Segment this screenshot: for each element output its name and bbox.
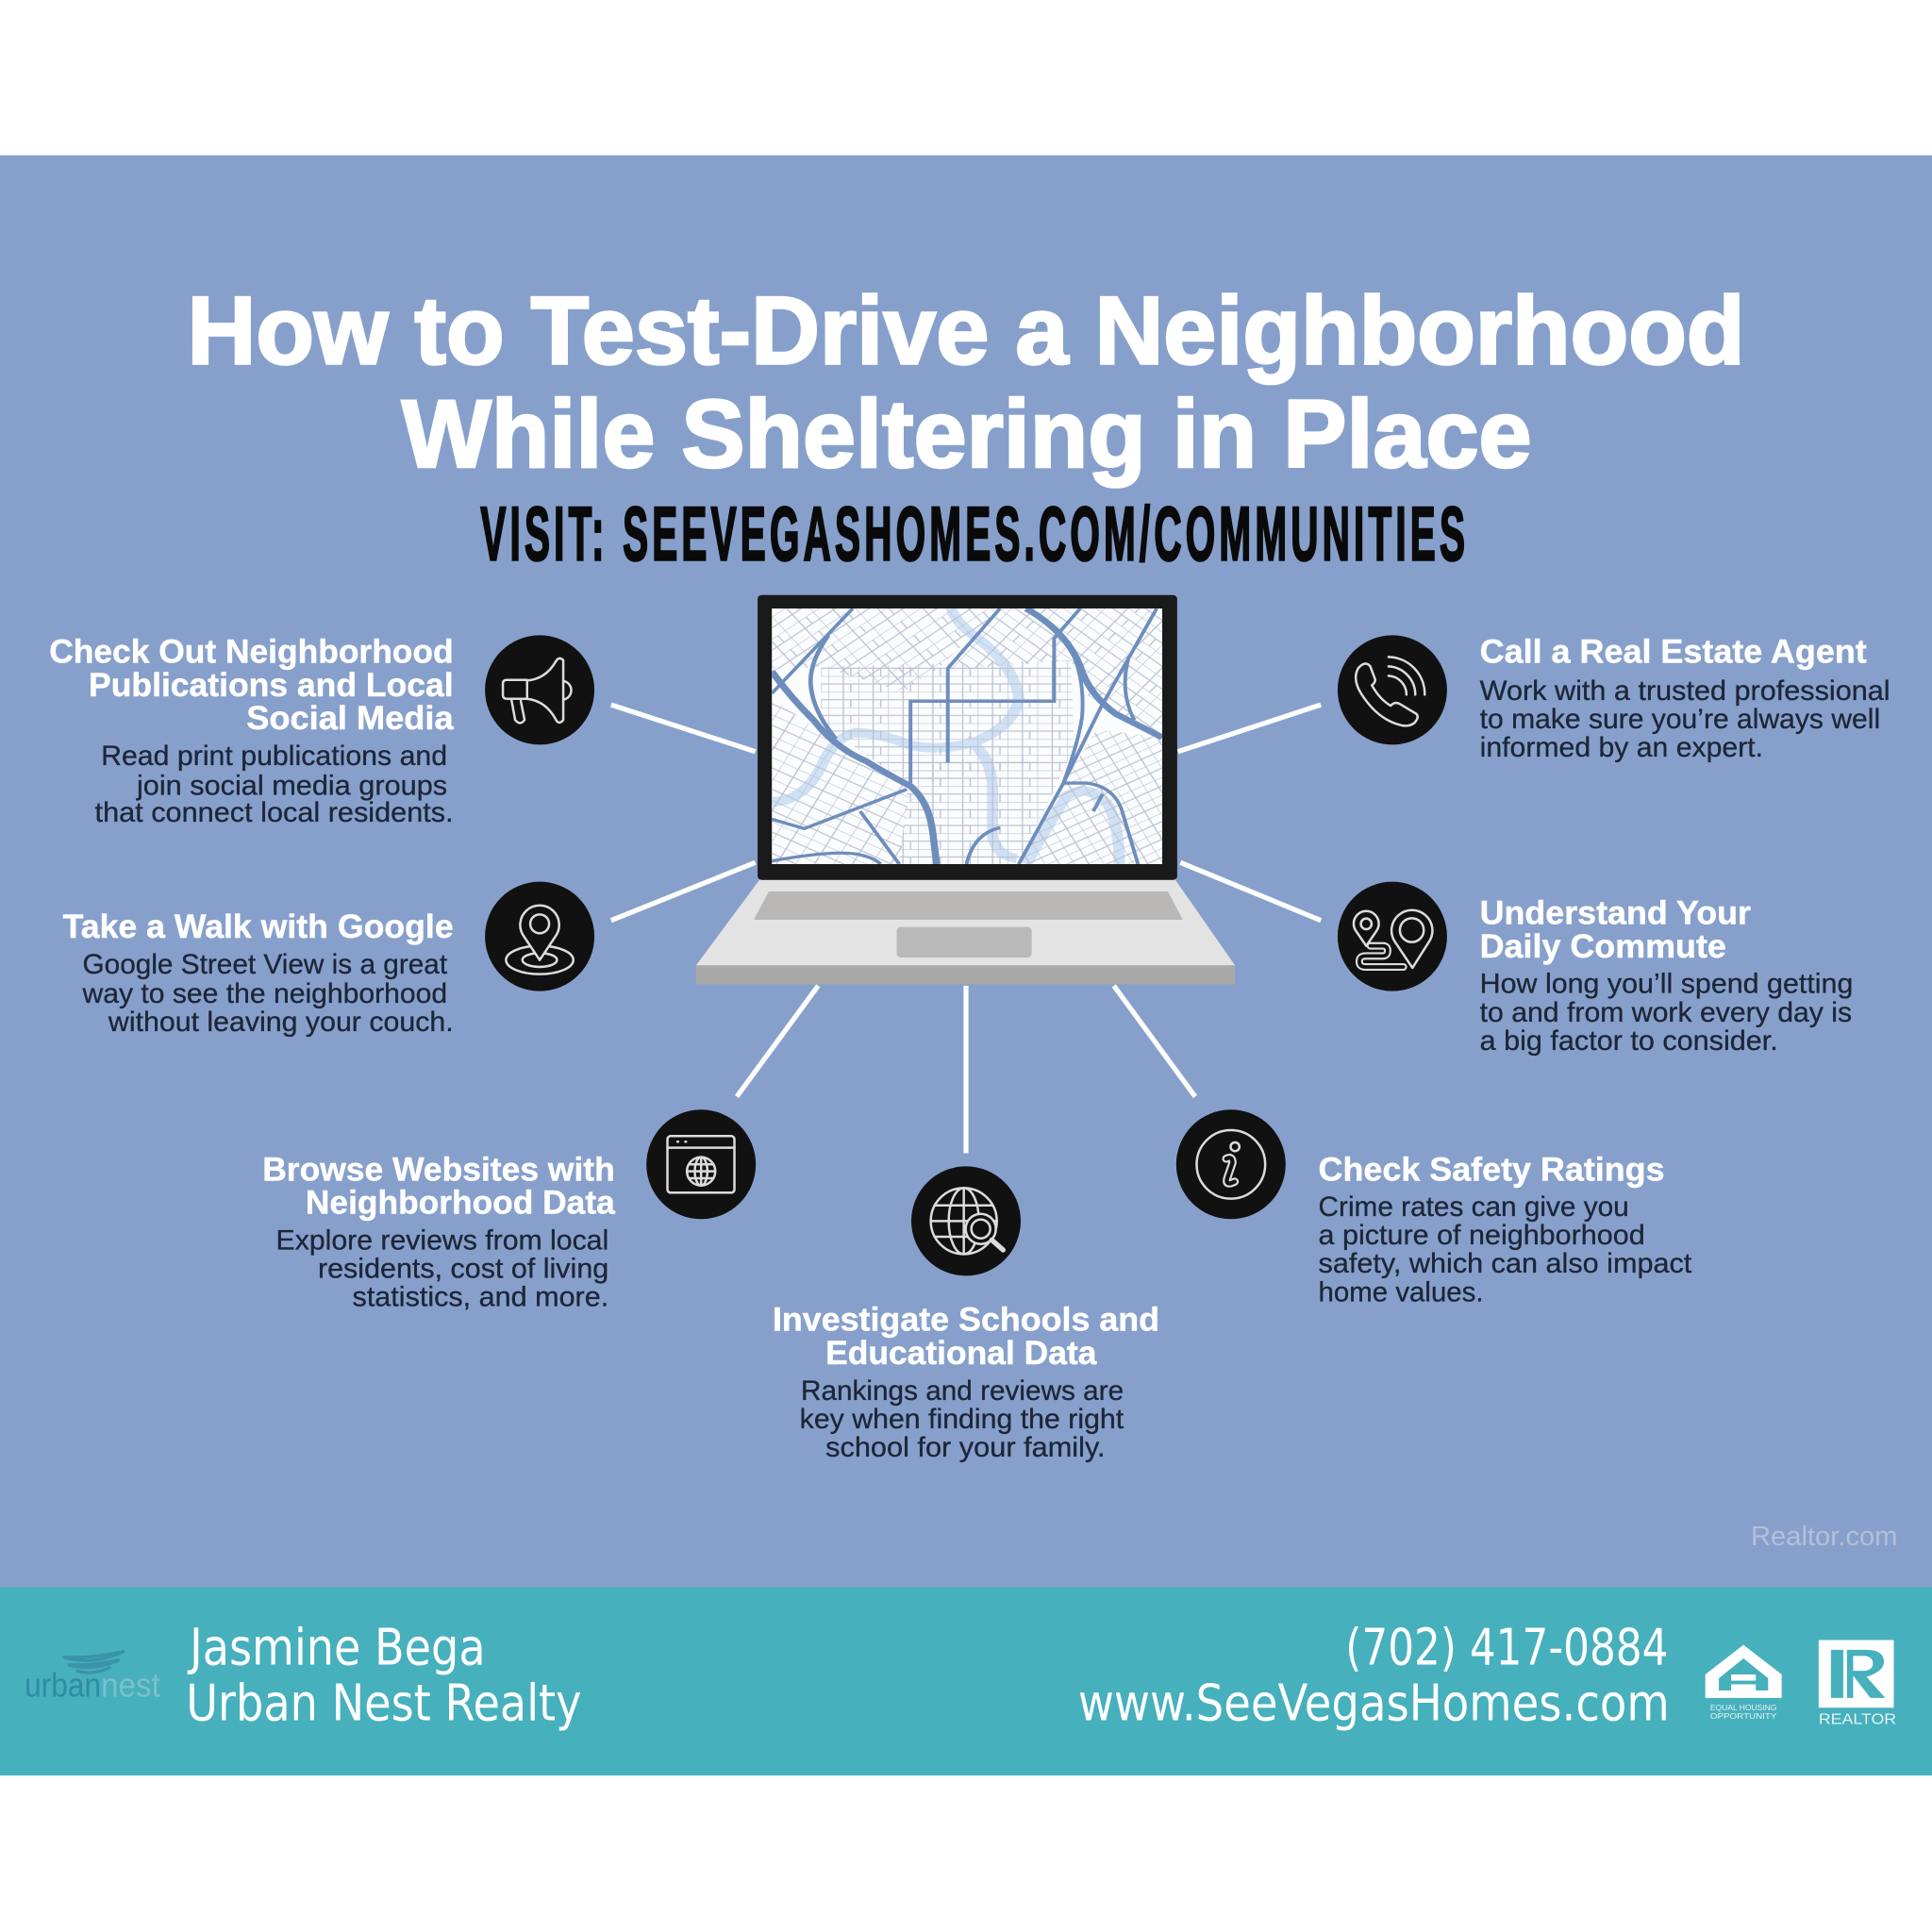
source credit: Realtor.com	[1751, 1522, 1897, 1552]
icon: phone	[1338, 635, 1447, 744]
heading: Social Media	[246, 700, 454, 737]
heading	[773, 1302, 1159, 1372]
body text: informed by an expert.	[1480, 732, 1763, 763]
panel: safety ratings	[1176, 1109, 1691, 1307]
body text: Crime rates can give you	[1319, 1191, 1629, 1223]
icon: two pins with route	[1338, 882, 1447, 991]
body text	[81, 949, 454, 1038]
footer band	[0, 1587, 1932, 1775]
body text: school for your family.	[825, 1432, 1106, 1463]
body text	[95, 741, 454, 828]
heading	[262, 1151, 615, 1222]
body text: Rankings and reviews are	[801, 1375, 1124, 1407]
heading: Educational Data	[825, 1335, 1097, 1372]
subtitle: visit URL: VISIT: SEEVEGASHOMES.COM/COMMUNITIES	[480, 491, 1465, 576]
laptop front edge	[696, 965, 1235, 984]
body text: residents, cost of living	[318, 1253, 608, 1284]
heading: Daily Commute	[1480, 928, 1726, 965]
icon: info circle	[1176, 1109, 1286, 1219]
heading: Browse Websites with	[262, 1151, 615, 1188]
body text	[800, 1375, 1124, 1463]
panel: schools and education	[773, 1166, 1159, 1463]
agent name and company	[186, 1618, 581, 1732]
body text: home values.	[1319, 1276, 1484, 1307]
body text: way to see the neighborhood	[81, 978, 447, 1009]
icon: equal housing opportunity: OPPORTUNITY	[1710, 1712, 1777, 1721]
body text: Google Street View is a great	[83, 949, 447, 980]
connector lines	[611, 705, 1321, 1154]
panel: daily commute	[1338, 882, 1853, 1057]
contact details: www.SeeVegasHomes.com	[1078, 1673, 1670, 1732]
agent name and company: Urban Nest Realty	[186, 1673, 581, 1732]
body text: safety, which can also impact	[1319, 1248, 1691, 1279]
logo: urban nest	[25, 1651, 160, 1705]
keyboard	[754, 891, 1183, 920]
icon: megaphone	[485, 635, 594, 744]
heading	[49, 634, 454, 737]
blue background panel	[0, 156, 1932, 1589]
body text	[1319, 1191, 1691, 1307]
icon: map pin on target	[485, 882, 594, 991]
body text: that connect local residents.	[95, 797, 454, 828]
heading: Call a Real Estate Agent	[1480, 634, 1867, 671]
body text	[276, 1224, 608, 1312]
contact details: (702) 417-0884	[1345, 1618, 1668, 1677]
title	[188, 276, 1744, 488]
touchpad	[897, 927, 1032, 958]
logo: urban nest: nest	[101, 1666, 160, 1705]
laptop deck	[696, 880, 1235, 965]
icon: equal housing opportunity	[1706, 1645, 1782, 1721]
heading: Understand Your	[1480, 895, 1751, 932]
agent name and company: Jasmine Bega	[188, 1618, 486, 1677]
title: While Sheltering in Place	[402, 380, 1532, 488]
body text: to make sure you’re always well	[1480, 704, 1880, 735]
laptop illustration	[696, 595, 1235, 984]
body text: to and from work every day is	[1480, 997, 1852, 1028]
body text: Explore reviews from local	[276, 1224, 608, 1256]
body text: a picture of neighborhood	[1319, 1220, 1645, 1251]
body text: Work with a trusted professional	[1480, 675, 1890, 707]
body text: How long you’ll spend getting	[1480, 969, 1853, 1000]
icon: realtor R: REALTOR	[1819, 1711, 1896, 1727]
heading: Take a Walk with Google	[63, 908, 454, 945]
screen bezel	[758, 595, 1177, 880]
body text: key when finding the right	[800, 1404, 1124, 1435]
heading: Neighborhood Data	[306, 1185, 615, 1222]
icon: browser window with globe	[646, 1109, 756, 1219]
icon: realtor R	[1819, 1640, 1896, 1727]
heading: Check Out Neighborhood	[49, 634, 454, 671]
panel: walk with google	[63, 882, 594, 1038]
logo: urban nest: urban	[25, 1666, 101, 1705]
panel: neighborhood publications	[49, 634, 594, 828]
street map on screen	[772, 608, 1162, 864]
body text: join social media groups	[136, 770, 447, 801]
body text: without leaving your couch.	[108, 1007, 454, 1038]
body text: Read print publications and	[101, 741, 447, 772]
heading: Check Safety Ratings	[1319, 1151, 1665, 1188]
heading	[1480, 895, 1751, 965]
panel: browse websites	[262, 1109, 756, 1312]
body text	[1480, 969, 1853, 1057]
body text: a big factor to consider.	[1480, 1025, 1778, 1057]
heading: Investigate Schools and	[773, 1302, 1159, 1339]
icon: equal housing opportunity: EQUAL HOUSING	[1710, 1704, 1776, 1712]
panel: call an agent	[1338, 634, 1890, 763]
body text	[1480, 675, 1890, 763]
title: How to Test-Drive a Neighborhood	[188, 276, 1744, 384]
body text: statistics, and more.	[353, 1281, 608, 1312]
contact details	[1078, 1618, 1670, 1732]
icon: globe with magnifier	[911, 1166, 1021, 1275]
heading: Publications and Local	[89, 667, 454, 704]
